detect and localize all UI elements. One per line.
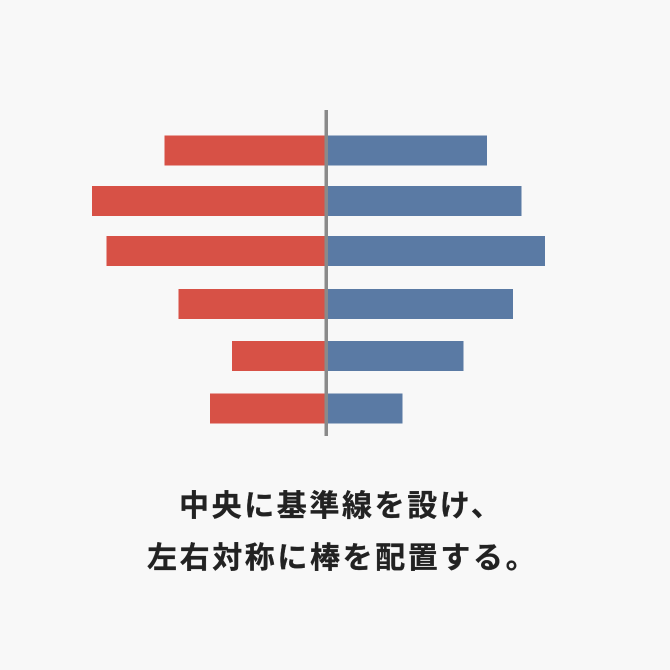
right bars (blue) [326, 136, 545, 424]
caption line 1: 中央に基準線を設け、 [179, 490, 504, 523]
caption [147, 490, 538, 575]
caption line 2: 左右対称に棒を配置する。 [147, 542, 538, 575]
center baseline [324, 110, 328, 436]
left bars (red) [92, 136, 326, 424]
